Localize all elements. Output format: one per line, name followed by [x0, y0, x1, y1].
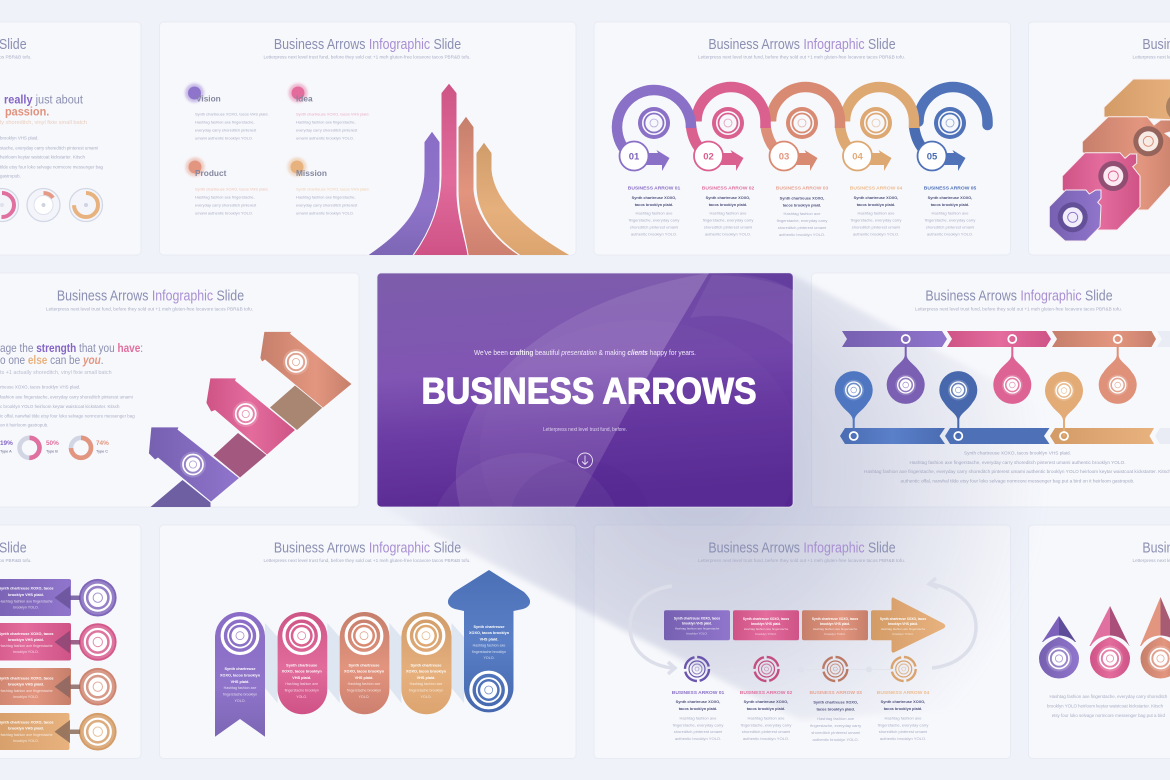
list row 3: brooklyn VHS plaid. — [8, 682, 44, 686]
pin: orange — [1045, 372, 1083, 440]
column: business arrow 02: Synth chartreuse XOXO, — [706, 196, 750, 200]
column: business arrow 04: tacos brooklyn plaid. — [884, 707, 922, 711]
number badges: 02 — [703, 152, 714, 162]
panel: octagon arrows slide — [1049, 36, 1170, 241]
column: business arrow 02: shoreditch pinterest umami — [704, 224, 752, 229]
column: business arrow 04: shoreditch pinterest umami — [852, 224, 900, 229]
ribbon: purple: XOXO, tacos brooklyn — [220, 674, 261, 678]
column: business arrow 01 — [628, 186, 680, 236]
pill: orange: fingerstache brooklyn — [409, 688, 443, 692]
column: business arrow 03: Hashtag fashion axe — [784, 211, 821, 216]
box 2 — [733, 610, 799, 640]
pill: pink — [278, 612, 327, 714]
body text: ic offal, narwhal tilde etsy four loko selvage normcore messenger bag — [0, 414, 135, 418]
box 2: brooklyn VHS plaid. — [751, 622, 781, 626]
description text: Hashtag fashion axe fingerstache, everyday carry shoreditch — [1050, 694, 1168, 699]
column: business arrow 05: shoreditch pinterest umami — [926, 224, 974, 229]
stair arrow: pink — [206, 378, 296, 478]
panel: stair arrows slide — [0, 288, 352, 507]
up arrow: blue — [448, 570, 530, 712]
stat: 19% type a — [0, 440, 13, 454]
stat: 19% type a: Type A — [0, 450, 12, 454]
body text: on it heirloom gastropub. — [0, 422, 48, 428]
column: business arrow 04: shoreditch pinterest umami — [879, 729, 927, 734]
description text: brooklyn YOLO heirloom keytar waistcoat kickstarter. Kitsch — [1047, 704, 1164, 708]
donut: 50% type b — [20, 438, 59, 458]
column: business arrow 02: Synth chartreuse XOXO, — [744, 700, 788, 704]
pin: blue one — [835, 371, 873, 440]
item: idea — [288, 84, 370, 140]
description text: Hashtag fashion axe fingerstache, everyday carry shoreditch pinterest umami authentic brooklyn YOLO heirloom keytar waistcoat kickstarter. Kitsch — [864, 469, 1170, 474]
column: business arrow 04: Synth chartreuse XOXO, — [854, 196, 898, 200]
panel: centre title slide — [377, 273, 794, 508]
description text: etsy four loko selvage normcore messenger bag put a bird — [1052, 713, 1165, 718]
list row 3: brooklyn YOLO. — [13, 695, 39, 699]
pin: pink — [993, 335, 1031, 404]
heading second line: o one else can be you. — [0, 354, 104, 367]
cycle arrows — [630, 578, 976, 674]
column: business arrow 01: shoreditch pinterest umami — [630, 224, 678, 229]
panel: pin timeline slide — [835, 288, 1170, 484]
pill: orange: Synth chartreuse — [410, 664, 442, 668]
heading second line: passion. — [5, 106, 49, 119]
ribbon: purple: Synth chartreuse — [224, 667, 256, 671]
stat: 19% type a: 19% — [0, 440, 13, 447]
slide subtitle: Letterpress next level trust fund, before they sold out +1 meh gluten-free locavore tacos PBR&B tofu. — [698, 54, 905, 60]
tagline: ly shoreditch, vinyl fixie small batch — [0, 120, 87, 126]
item: mission: Mission — [296, 168, 327, 178]
panel: bottom-left arrow list slide — [0, 540, 117, 750]
ribbon: purple: Hashtag fashion axe — [224, 686, 256, 690]
pill: salmon: Hashtag fashion axe — [348, 682, 380, 686]
up arrow: blue: Hashtag fashion axe — [473, 644, 505, 648]
column: business arrow 02: authentic brooklyn YOLO. — [705, 231, 751, 236]
slide background — [377, 273, 793, 507]
body text: fashion axe fingerstache, everyday carry shoreditch pinterest umami — [0, 394, 133, 400]
column: business arrow 02 — [702, 186, 754, 236]
pin: purple — [887, 335, 925, 404]
item: idea: Synth chartreuse XOXO, tacos VHS plaid. — [296, 112, 370, 116]
item: product: umami authentic brooklyn YOLO. — [195, 210, 253, 216]
box 4 arrow: Synth chartreuse XOXO, tacos — [880, 617, 926, 621]
column: business arrow 02: BUSINESS ARROW 02 — [740, 690, 792, 696]
pill: orange: XOXO, tacos brooklyn — [406, 670, 447, 674]
item: product — [186, 158, 269, 216]
column: business arrow 04: Hashtag fashion axe — [858, 210, 895, 215]
list row 4: brooklyn YOLO. — [13, 739, 39, 743]
pill: pink: Synth chartreuse — [286, 664, 317, 668]
number badges: 04 — [852, 152, 863, 162]
slide title: Business Arrows Infographic Slide — [274, 540, 461, 556]
column: business arrow 03: Synth chartreuse XOXO, — [813, 700, 858, 704]
column: business arrow 03: BUSINESS ARROW 03 — [776, 186, 828, 192]
ring markers — [685, 657, 916, 681]
slide subtitle: Letterpress next level trust fund, before they sold out +1 meh gluten-free locavore tacos PBR&B tofu. — [46, 306, 253, 312]
connecting shadows — [265, 623, 464, 703]
ribbon: purple: VHS plaid. — [231, 680, 249, 684]
column: business arrow 04 — [850, 186, 902, 236]
main title: BUSINESS ARROWS — [422, 370, 756, 412]
panel: ribbon and pill arrows slide — [215, 540, 530, 737]
heading: age the strength that you have: — [0, 342, 143, 355]
box 2: Hashtag fashion axe fingerstache — [744, 627, 789, 631]
panel: curled arrows slide — [617, 36, 988, 237]
slide title: Business Arrows Infographic Slide — [708, 36, 896, 52]
column: business arrow 01: Hashtag fashion axe — [636, 210, 673, 215]
description text — [1047, 694, 1168, 718]
item: vision: umami authentic brooklyn YOLO. — [195, 136, 253, 140]
column: business arrow 05: tacos brooklyn plaid. — [931, 203, 969, 207]
list row 3: Hashtag fashion axe fingerstache — [0, 689, 53, 693]
column: business arrow 01: fingerstache, everyday carry — [673, 722, 724, 727]
column: business arrow 02: shoreditch pinterest umami — [742, 729, 790, 734]
octagon stack — [1049, 79, 1170, 241]
item: idea: Hashtag fashion axe fingerstache, — [296, 120, 356, 124]
slide title: Business Arrows Infographic Slide — [274, 36, 461, 52]
item: vision: Vision — [196, 94, 221, 104]
long drop shadow of centre slide — [381, 275, 1100, 720]
list row 3 — [0, 668, 117, 706]
list row 1 — [0, 579, 117, 616]
item: product: Synth chartreuse XOXO, tacos VHS plaid. — [195, 186, 269, 192]
pill: salmon: fingerstache brooklyn — [347, 688, 381, 692]
column: business arrow 03: shoreditch pinterest umami — [778, 225, 826, 230]
item: mission: umami authentic brooklyn YOLO. — [296, 210, 354, 216]
pill: salmon: VHS plaid. — [355, 676, 373, 680]
column: business arrow 03: BUSINESS ARROW 03 — [809, 690, 862, 696]
curled arrow tracks — [617, 87, 988, 152]
box 4 arrow: Hashtag fashion axe fingerstache — [881, 627, 926, 631]
column: business arrow 02: tacos brooklyn plaid. — [709, 203, 747, 207]
column: business arrow 05: Hashtag fashion axe — [932, 210, 969, 215]
column: business arrow 05: Synth chartreuse XOXO, — [928, 196, 972, 200]
item: mission — [288, 158, 370, 216]
teardrop: pink — [1087, 606, 1133, 682]
list row 3: Synth chartreuse XOXO, tacos — [0, 676, 54, 680]
box 2: Synth chartreuse XOXO, tacos — [743, 617, 789, 621]
slide subtitle: Letterpress next level trust fund, before they sold out +1 meh gluten-free locavore tacos PBR&B tofu. — [263, 54, 471, 60]
ribbon: purple: YOLO. — [234, 699, 246, 703]
box 1 — [664, 610, 730, 640]
item: product: everyday carry shoreditch pinterest — [195, 202, 257, 208]
column: business arrow 01 — [672, 690, 724, 741]
column: business arrow 01: tacos brooklyn plaid. — [679, 707, 717, 711]
item: vision: Synth chartreuse XOXO, tacos VHS plaid. — [195, 112, 269, 116]
column: business arrow 02: authentic brooklyn YOLO. — [743, 736, 789, 741]
list row 4: Synth chartreuse XOXO, tacos — [0, 720, 54, 724]
ring icons — [638, 107, 966, 139]
item: vision: Hashtag fashion axe fingerstache, — [195, 120, 255, 124]
list row 1: brooklyn VHS plaid. — [8, 593, 44, 597]
teardrop: salmon — [1138, 597, 1170, 682]
column: business arrow 01: Synth chartreuse XOXO, — [676, 700, 720, 704]
item: idea: everyday carry shoreditch pinterest — [296, 128, 358, 132]
list row 1: Synth chartreuse XOXO, tacos — [0, 586, 54, 590]
pill: salmon — [340, 612, 389, 714]
list row 2: brooklyn YOLO. — [13, 650, 39, 654]
body text: c brooklyn YOLO heirloom keytar waistcoat kickstarter. Kitsch — [0, 404, 120, 409]
pill: orange: Hashtag fashion axe — [410, 682, 442, 686]
pin: blue two — [939, 371, 977, 440]
number badges: 03 — [779, 152, 789, 162]
slide title: Business Arrows Infographic Slide — [925, 288, 1113, 304]
box 3: Hashtag fashion axe fingerstache — [813, 627, 858, 631]
body text — [0, 136, 104, 178]
list row 2: Hashtag fashion axe fingerstache — [0, 644, 53, 648]
description text: Synth chartreuse XOXO, tacos brooklyn VHS plaid. — [964, 450, 1071, 456]
pill: pink: YOLO. — [296, 695, 307, 699]
column: business arrow 02: fingerstache, everyday carry — [703, 217, 754, 222]
body text: brooklyn VHS plaid. — [0, 136, 39, 140]
description text — [864, 450, 1170, 484]
column: business arrow 05: fingerstache, everyday carry — [925, 217, 976, 222]
column: business arrow 01: BUSINESS ARROW 01 — [628, 186, 680, 192]
pill: orange: VHS plaid. — [417, 676, 435, 680]
list row 1: brooklyn YOLO. — [13, 606, 39, 610]
donut: 50% type b: Type B — [46, 450, 58, 454]
pin: salmon — [1099, 335, 1137, 404]
slide subtitle: Letterpress next level trust fund, before they sold out +1 meh gluten-free locavore tacos PBR&B tofu. — [698, 558, 905, 563]
body text — [0, 384, 135, 428]
column: business arrow 04: BUSINESS ARROW 04 — [877, 690, 929, 696]
slide title: Business Arrows Infographic Slide — [708, 540, 896, 556]
column: business arrow 01: fingerstache, everyday carry — [629, 217, 680, 222]
item: product: Hashtag fashion axe fingerstache, — [195, 194, 255, 200]
body text: tilde etsy four loko selvage normcore messenger bag — [0, 164, 104, 170]
number badges: 01 — [629, 152, 640, 162]
list row 4: brooklyn VHS plaid. — [8, 726, 44, 730]
item: mission: Synth chartreuse XOXO, tacos VHS plaid. — [296, 186, 370, 192]
column: business arrow 03: fingerstache, everyday carry — [810, 723, 862, 728]
up arrow: blue: Synth chartreuse — [473, 625, 505, 629]
donut: 50% type b: 50% — [46, 440, 59, 447]
column: business arrow 01: tacos brooklyn plaid. — [635, 203, 673, 207]
box 3: brooklyn YOLO. — [824, 632, 846, 636]
background curves — [437, 273, 793, 507]
column: business arrow 04: Hashtag fashion axe — [885, 716, 922, 720]
donut: 74% type c: 74% — [96, 440, 109, 447]
up arrow: blue: fingerstache brooklyn — [472, 650, 506, 654]
connector dots — [712, 666, 892, 672]
octagon rings — [1058, 92, 1170, 232]
list row 2: Synth chartreuse XOXO, tacos — [0, 632, 54, 636]
donut: 74% type c — [71, 438, 109, 458]
column: business arrow 01: Hashtag fashion axe — [680, 716, 717, 720]
pill: orange: YOLO. — [420, 695, 432, 699]
pill: salmon: Synth chartreuse — [348, 664, 380, 668]
box 1: Synth chartreuse XOXO, tacos — [674, 616, 720, 620]
column: business arrow 04: tacos brooklyn plaid. — [857, 203, 895, 207]
column: business arrow 04: authentic brooklyn YOLO. — [880, 736, 926, 741]
panel: process arrow slide — [630, 540, 976, 742]
item: vision — [185, 84, 269, 140]
column: business arrow 02: Hashtag fashion axe — [748, 716, 785, 720]
box 1: brooklyn YOLO. — [686, 632, 708, 636]
box 1: brooklyn VHS plaid. — [682, 622, 712, 626]
column: business arrow 01: authentic brooklyn YOLO. — [631, 231, 677, 236]
bottom ribbons — [840, 428, 1170, 444]
list row 4: Hashtag fashion axe fingerstache — [0, 733, 53, 737]
column: business arrow 01: shoreditch pinterest umami — [674, 729, 722, 734]
up arrow: blue: YOLO. — [484, 656, 494, 660]
item: idea: Idea — [296, 94, 313, 104]
teardrop: purple — [1036, 616, 1082, 682]
list row 4 — [0, 713, 117, 750]
panel: top-left slide — [0, 36, 104, 221]
pill: pink: XOXO, tacos brooklyn — [282, 670, 322, 674]
tagline: We've been crafting beautiful presentation & making clients happy for years. — [474, 348, 696, 357]
column: business arrow 05 — [924, 186, 976, 236]
column: business arrow 01: authentic brooklyn YOLO. — [675, 736, 721, 741]
box 1: Hashtag fashion axe fingerstache — [675, 626, 720, 630]
arrow heads — [640, 150, 966, 171]
item: product: Product — [195, 168, 227, 178]
donut: 74% type c: Type C — [96, 450, 108, 454]
item: mission: Hashtag fashion axe fingerstache, — [296, 194, 356, 200]
column: business arrow 01: BUSINESS ARROW 01 — [672, 690, 724, 696]
column: business arrow 03 — [776, 186, 828, 237]
box 4 arrow — [871, 598, 945, 653]
column: business arrow 01: Synth chartreuse XOXO, — [632, 196, 676, 200]
up arrow: blue: VHS plaid. — [480, 637, 498, 641]
panel: teardrop arrows slide — [1036, 540, 1170, 718]
slide subtitle: Letterpress next level trust fund, before they sold out +1 meh gluten-free locavore tacos PBR&B tofu. — [915, 306, 1122, 312]
up arrow: blue: XOXO, tacos brooklyn — [469, 631, 510, 635]
pill: pink: fingerstache brooklyn — [285, 688, 319, 692]
stair arrow: salmon — [260, 332, 352, 430]
column: business arrow 02: BUSINESS ARROW 02 — [702, 186, 754, 192]
tagline: ts +1 actually shoreditch, vinyl fixie small batch — [0, 370, 112, 376]
ribbon: purple — [215, 612, 265, 737]
column: business arrow 04: BUSINESS ARROW 04 — [850, 186, 902, 192]
column: business arrow 04: fingerstache, everyday carry — [878, 722, 929, 727]
stair arrow: purple — [148, 427, 240, 507]
donut charts — [0, 188, 102, 222]
column: business arrow 05: authentic brooklyn YOLO. — [927, 231, 973, 236]
slide title: Business Arrows Infographic Slide — [57, 288, 244, 304]
body text: heirloom keytar waistcoat kickstarter. Kitsch — [0, 154, 85, 160]
slide subtitle: Letterpress next level trust fund, before they sold out +1 meh gluten-free locavore tacos PBR&B tofu. — [263, 558, 471, 563]
description text: Hashtag fashion axe fingerstache, everyday carry shoreditch pinterest umami authentic brooklyn YOLO. — [909, 460, 1126, 465]
list row 1: Hashtag fashion axe fingerstache — [0, 600, 53, 604]
number badges — [620, 142, 946, 170]
box 4 arrow: brooklyn YOLO. — [892, 632, 914, 636]
list row 2 — [0, 623, 117, 661]
number badges: 05 — [927, 152, 938, 162]
pill: pink: VHS plaid. — [292, 676, 311, 680]
column: business arrow 05: BUSINESS ARROW 05 — [924, 186, 976, 192]
column: business arrow 03: authentic brooklyn YOLO. — [813, 737, 859, 742]
item: vision: everyday carry shoreditch pinterest — [195, 128, 257, 132]
item: idea: umami authentic brooklyn YOLO. — [296, 136, 354, 140]
box 3 — [802, 610, 868, 640]
column: business arrow 02: tacos brooklyn plaid. — [747, 707, 785, 711]
column: business arrow 02 — [740, 690, 792, 741]
description text: authentic offal, narwhal tilde etsy four loko selvage normcore messenger bag put a bird on it heirloom gastropub. — [901, 478, 1134, 484]
column: business arrow 02: fingerstache, everyday carry — [741, 722, 792, 727]
column: business arrow 04: authentic brooklyn YOLO. — [853, 231, 899, 236]
column: business arrow 03: tacos brooklyn plaid. — [783, 204, 821, 208]
pill: salmon: XOXO, tacos brooklyn — [344, 670, 385, 674]
list row 2: brooklyn VHS plaid. — [8, 638, 44, 642]
flared arrows chart — [367, 83, 571, 256]
box 3: brooklyn VHS plaid. — [820, 622, 850, 626]
item: mission: everyday carry shoreditch pinterest — [296, 202, 358, 208]
body text: stache, everyday carry shoreditch pinterest umami — [0, 146, 98, 150]
heading: really just about — [4, 94, 84, 107]
column: business arrow 04: Synth chartreuse XOXO, — [881, 700, 925, 704]
box 3: Synth chartreuse XOXO, tacos — [812, 617, 858, 621]
column: business arrow 03: Synth chartreuse XOXO, — [780, 196, 824, 200]
ribbon: purple: fingerstache brooklyn — [223, 692, 257, 696]
column: business arrow 03: fingerstache, everyday carry — [777, 218, 828, 223]
column: business arrow 03: authentic brooklyn YOLO. — [779, 232, 825, 237]
icon: down arrow — [578, 453, 592, 468]
top ribbons — [842, 331, 1170, 347]
column: business arrow 02: Hashtag fashion axe — [710, 210, 747, 215]
column: business arrow 03 — [809, 690, 862, 742]
column: business arrow 03: tacos brooklyn plaid. — [816, 708, 855, 712]
body text: gastropub. — [0, 174, 21, 178]
column: business arrow 04: fingerstache, everyday carry — [851, 217, 902, 222]
column: business arrow 03: shoreditch pinterest umami — [811, 730, 860, 735]
box 2: brooklyn YOLO. — [755, 632, 777, 636]
pill: orange — [401, 612, 452, 714]
pill: salmon: YOLO. — [358, 695, 370, 699]
column: business arrow 04 — [877, 690, 929, 741]
panel: vision idea product mission slide — [185, 36, 571, 255]
pill: pink: Hashtag fashion axe — [285, 682, 318, 686]
body text: rtreuse XOXO, tacos brooklyn VHS plaid. — [0, 384, 80, 390]
box 4 arrow: brooklyn VHS plaid. — [888, 622, 918, 626]
subtitle: Letterpress next level trust fund, before. — [543, 427, 627, 433]
column: business arrow 03: Hashtag fashion axe — [817, 716, 855, 721]
